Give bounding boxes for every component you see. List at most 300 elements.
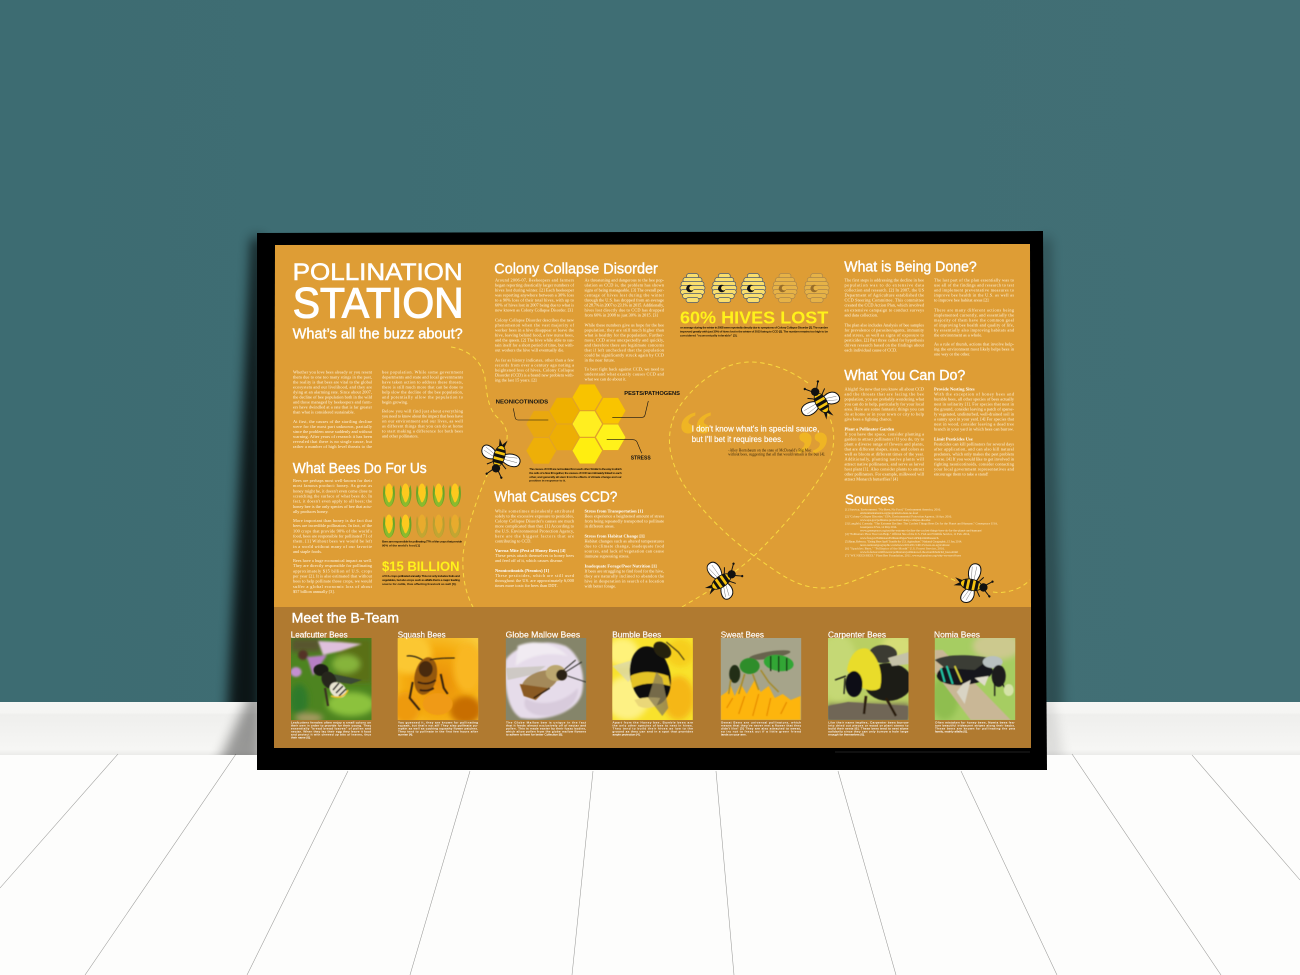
intro text: you need to know about the impact that bees have	[382, 413, 463, 418]
card: leafcutter bees: and protect it with chewed up bits of leaves, thus	[291, 732, 371, 736]
what is being done text: ing the environment most likely helps bees in	[934, 347, 1015, 352]
title: STATION	[293, 280, 464, 327]
card: carpenter bees: enough for themselves [6].	[828, 732, 865, 736]
quote: “	[678, 398, 713, 475]
intro text: than what is considered sustainable.	[293, 409, 355, 414]
colony collapse text: was reporting anywhere between a 30% loss	[495, 292, 574, 297]
colony collapse text: and the queen. [2] The hive while able to sus-	[495, 337, 575, 342]
what is being done text: The plan also includes Analysis of bee samples	[844, 322, 924, 327]
intro text: Below you will find just about everything	[382, 408, 464, 413]
what is being done text: each individual cause of CCD.	[844, 347, 897, 352]
what is being done text: by essentially also improving habitats and	[934, 327, 1015, 332]
card: globe mallow bees: which allow pollen from the globe mallow flowers	[506, 729, 586, 733]
colony collapse text: population, they are still much higher than	[584, 327, 665, 333]
panel: meet the b-team	[274, 607, 1031, 748]
colony collapse text: could be significantly struck again by CCD	[584, 352, 664, 357]
colony collapse text: To best fight back against CCD, we need to	[584, 367, 664, 373]
intro text	[293, 370, 464, 449]
what causes ccd text: times more toxic for bees than DDT.	[495, 583, 558, 588]
card: carpenter bees: solidarily since they can only burrow a hole large	[828, 729, 909, 733]
sources list: [5] Ryan, Rebecca. "Dying Bees Spell Trouble for U.S. Agriculture." National Geographic, 15 Jan. 2014.	[845, 539, 962, 544]
card: bumble bees: Apart from the Honey bee, Bumble bees are	[612, 720, 693, 724]
heading: meet the b-team: Meet the B-Team	[292, 609, 399, 625]
quote: but I'll bet it requires bees.	[692, 434, 783, 444]
colony collapse text: As threatening and dangerous to the bee pop-	[584, 277, 665, 282]
what bees do text: 100 crops that provide 90% of the world's	[293, 528, 372, 533]
what causes ccd text: immune supressing stress.	[584, 553, 630, 558]
what you can do text: predators, which only makes the pest problem	[934, 451, 1015, 457]
colony collapse text	[495, 277, 665, 382]
colony collapse text: centage of hives lost during the winter	[584, 292, 665, 297]
what you can do text: Plant a Pollinator Garden	[844, 426, 895, 431]
icon: corn pictogram	[383, 484, 461, 538]
colony collapse text: hives lost directly due to CCD has dropped	[584, 307, 665, 312]
sources list	[845, 507, 998, 559]
intro text: ers have dwindled at a rate that is far greater	[293, 404, 373, 409]
card: squash bees: mpkin as well as cooking squashy flower patches.	[398, 726, 478, 730]
what you can do text: nest in wood, consider leaving a dead tree	[934, 422, 1014, 428]
colony collapse text: worker bees in a hive disappear or leave the	[495, 327, 574, 332]
what you can do text: give bees a fighting chance.	[844, 417, 892, 422]
what you can do text: after application, and can also kill natural	[934, 446, 1015, 452]
what causes ccd text: These pesticides, which are still used	[495, 573, 575, 579]
colony collapse text: of 28.7% in 2007 to 23.1% in 2015. Additionally,	[584, 302, 664, 308]
icon: bee lower right	[951, 560, 997, 607]
colony collapse text: in the near future.	[584, 357, 615, 362]
what causes ccd text: due to climate change, inadequate food	[584, 543, 665, 549]
stat: $15 billion: $15 BILLION	[382, 558, 460, 574]
intro text: since the problem arose suddenly and without	[293, 429, 373, 434]
what bees do text: $57 billion annually [3].	[293, 589, 335, 594]
sources list: [6] "Sparkles: Bees." "Pollinator of the Month" U.S. Forest Service, 2016.	[845, 546, 945, 552]
what is being done text: an extensive campaign to conduct surveys	[844, 307, 924, 312]
what causes ccd text: and feed off of it, which causes disease.	[495, 558, 563, 564]
what causes ccd text: Colony Collapse Disorder's causes are much	[495, 518, 575, 523]
honeycomb caption: The causes of CCD are not isolated from each other. Similar to the way in which	[529, 467, 622, 471]
what causes ccd text: If bees are struggling to find food for the hive,	[584, 569, 664, 575]
honeycomb caption: the cells of a hive fit together, the causes of CCD are intimately linked to each	[529, 471, 622, 475]
what is being done text: CCD Steering Committee. This committee	[844, 297, 924, 302]
what bees do text: bees to help pollinate those crops, we would	[293, 579, 373, 585]
what causes ccd text: Stress from Transportation [1]	[584, 508, 644, 513]
card: squash bees: You guessed it, they are known for pollinating	[398, 720, 478, 724]
intro text: to start making a difference for both bees	[382, 428, 463, 433]
card: globe mallow bees: The Globe Mallow bee is unique in the fact	[506, 720, 586, 724]
card: squash bees	[398, 631, 478, 736]
what you can do text: With the exception of honey bees and	[934, 392, 1015, 397]
quote: I don't know what's in special sauce,	[692, 424, 819, 434]
heading: colony collapse disorder: Colony Collapse Disorder	[494, 260, 658, 277]
what bees do text: honey bee is the only species of bee that actu-	[293, 504, 373, 509]
what causes ccd text: solely to the excessive exposure to pesticides,	[495, 513, 574, 519]
honeycomb caption: other, and generally all stem from the effects of climate change and our	[529, 475, 623, 479]
what causes ccd text: contributing to CCD.	[495, 538, 531, 543]
intro text: Whether you love bees already or you resent	[293, 370, 373, 375]
card: globe mallow bees	[505, 629, 587, 736]
what you can do text: fighting neonicotinoids, consider contacting	[934, 461, 1015, 467]
colony collapse text: Disorder (CCD) is a brand new problem with-	[495, 372, 575, 377]
card: nomia bees	[934, 631, 1016, 733]
what you can do text: Limit Pesticides Use	[934, 436, 973, 441]
floor with planks	[0, 754, 1300, 975]
$15 billion caption: of U.S. crops pollinated annually. This not only includes fruits and	[382, 574, 460, 578]
what you can do text: Alright! So now that you know all about CCD	[844, 387, 924, 392]
card: sweat bees: Sweat Bees are universal pollinators, which	[721, 720, 801, 724]
what is being done text: The last part of the plan essentially was to	[934, 277, 1014, 282]
what you can do text: host plant [1]. Also consider plants to attract	[844, 466, 925, 471]
$15 billion caption: source for cattle, thus affecting livestock as well [3].	[382, 582, 457, 586]
intro text: and those managed by beekeepers and farm-	[293, 399, 373, 404]
what is being done text: the environment as a whole.	[934, 332, 982, 337]
baseboard	[0, 702, 1300, 755]
what you can do text: plant a diverse range of flowers and plants,	[844, 441, 924, 447]
card: sweat bees	[721, 629, 802, 736]
corn caption: 90% of the world's food [1]	[382, 544, 420, 548]
what is being done text: As a rule of thumb, actions that involve help-	[934, 342, 1015, 348]
card: nomia bees: family, mainly alfalfa [6].	[935, 729, 968, 733]
card: globe mallow bees: pollen. This is made easier by their fuzzy bodies,	[506, 726, 586, 730]
title: POLLINATION	[293, 259, 463, 286]
what is being done text: pesticides. [2] Part three called for hypothesis	[844, 337, 924, 342]
intro text: and other pollinators.	[382, 433, 419, 438]
intro text: begin growing.	[382, 399, 408, 404]
title: What’s all the buzz about?	[293, 326, 463, 342]
card: carpenter bees: Like their name implies, Carpenter bees burrow	[828, 720, 909, 724]
stat: 60% hives lost: 60% HIVES LOST	[680, 307, 829, 327]
what you can do text: branch in your yard in which bees can burrow.	[934, 427, 1014, 432]
heading: what you can do: What You Can Do?	[844, 367, 965, 384]
sources list: environmentamerica.org/programs/no-bees-no-food	[860, 511, 918, 515]
what you can do text: the ground, consider leaving a patch of sparse-	[934, 407, 1015, 413]
what causes ccd text: sources, and lack of vegetation can cause	[584, 548, 664, 554]
colony collapse text: tain itself for a short period of time, but with-	[495, 342, 575, 348]
card: sweat bees: lands on your arm.	[721, 732, 747, 736]
what bees do text: most famous product: honey. As great as	[293, 483, 372, 488]
what you can do text: attract Monarch butterflies! [4]	[844, 476, 898, 481]
poster	[274, 244, 1031, 748]
icon: bee lower loop	[695, 552, 749, 606]
icon: beehives pictogram	[680, 274, 829, 302]
card: leafcutter bees: Leafcutter Bees	[291, 629, 348, 639]
heading: what is being done: What is Being Done?	[844, 259, 977, 276]
card: globe mallow bees: to adhere to them for better Collection [6].	[506, 732, 563, 736]
what causes ccd text: in different areas.	[584, 523, 615, 528]
colony collapse text: hive, leaving behind food, a few nurse bees,	[495, 332, 574, 338]
colony collapse text: hives lost during winter. [2] Each beekeeper	[495, 287, 575, 292]
sources list: Greenpeace USA, 14 May 2014.	[860, 525, 897, 530]
sources list: [3] Langfeld, Cassady. "The Extreme Decline: The Coolest Things Bees Do for the Planet and Humans." Greenpeace USA.	[845, 522, 998, 526]
what causes ccd text: Inadequate Forage/Poor Nutrition [1]	[584, 564, 657, 569]
colony collapse text: what is healthy for the population. Further-	[584, 332, 665, 337]
card: bumble bees: ground as they can and in a spot that provides	[612, 729, 693, 733]
intro text: At first, the causes of the startling decline	[293, 419, 372, 425]
what you can do text: well as bloom at different times of the year.	[844, 451, 924, 456]
what you can do text: Additionally, planting native plants will	[844, 456, 925, 462]
what is being done text: improve bee health in the U.S. as well as	[934, 292, 1014, 297]
intro text: on our environment and our lives, as well	[382, 418, 464, 424]
card: leafcutter bees: their own in order to provide for their young. They	[291, 723, 371, 727]
what causes ccd text: the U.S. Environmental Protection Agency,	[495, 528, 574, 534]
card: leafcutter bees: their name [6].	[291, 735, 311, 739]
what you can do text: your local government representatives and	[934, 466, 1015, 471]
what bees do text: bees are incredible pollinators. In fact, of the	[293, 523, 372, 529]
what is being done text: and stress, as well as signs of exposure to	[844, 332, 924, 338]
what bees do text: ally produces honey.	[293, 509, 328, 514]
colony collapse text: ing the last 15 years. [2]	[495, 377, 537, 382]
what you can do text: nest in solitarity [1]. For species that nest in	[934, 402, 1015, 407]
what is being done text: created the CCD Action Plan, which involved	[844, 302, 925, 308]
colony collapse text: to a 90% loss of their total hives, with up to	[495, 297, 574, 303]
colony collapse text: from 60% in 2008 to just 30% in 2015. [3]	[584, 312, 658, 317]
what you can do text: Provide Nesting Sites	[934, 387, 975, 392]
heading: what causes ccd: What Causes CCD?	[494, 489, 617, 506]
card: carpenter bees: build their nests [6]. These bees tend to nest alone	[828, 726, 909, 730]
what you can do text: area. Here are some fantastic things you can	[844, 407, 925, 412]
what is being done text: collection and research. [2] In 2007, the US	[844, 287, 925, 293]
quote: without bees, suggesting that all that would remain is the bun [4].	[728, 452, 825, 458]
corn caption	[382, 540, 462, 548]
colony collapse text: that if left unchecked that the population	[584, 347, 665, 352]
what bees do text: in a world without many of our favorite	[293, 544, 372, 549]
hives caption: considered "economically tolerable" [3].	[680, 334, 738, 338]
card: sweat bees: means that they've never met a flower that they	[721, 723, 801, 727]
icon: bee upper right of loop	[792, 375, 846, 428]
colony collapse text: As far as history indicates, other than a few	[495, 357, 575, 363]
intro text: help slow the decline of the bee population,	[382, 389, 463, 395]
what causes ccd text: Stress from Habitat Change [1]	[584, 533, 645, 538]
title	[293, 259, 464, 342]
honeycomb diagram: NEONICOTINOIDS	[496, 400, 549, 406]
quote: -Alley Bornsbaum on the state of McDonald's Big Mac	[728, 448, 812, 452]
what you can do text	[844, 387, 1015, 481]
colony collapse text: 60% of hives lost in 2007 being due to what is	[495, 302, 574, 307]
colony collapse text: Around 2006-07, Beekeepers and farmers	[495, 277, 574, 283]
card: squash bees: sunrise [4].	[398, 732, 413, 736]
quote	[678, 398, 830, 495]
card: bumble bees: Bumble Bees	[612, 629, 661, 639]
corn caption: Bees are responsible for pollinating 77% of the crops that provide	[382, 540, 462, 544]
what causes ccd text	[495, 508, 665, 589]
colony collapse text: signs of being manageable. [3] The overall per-	[584, 287, 665, 292]
poster gold background	[274, 244, 1031, 608]
what bees do text: and staple foods.	[293, 549, 322, 554]
colony collapse text: what we can do about it.	[584, 377, 627, 382]
card: carpenter bees: into dried out pieces or wood or plant stems to	[828, 723, 909, 727]
hives caption: on average during the winter in 2008 were reportedly directly due to symptoms of Colony Collapse Disorder [2]. The number	[680, 326, 829, 330]
intro text: rather a number of high level threats to the	[293, 444, 372, 449]
what is being done text: and implement preventative measures to	[934, 287, 1014, 292]
sources list: news.nationalgeographic.com/news/2014/01/140115-bees-us-agriculture/	[860, 543, 950, 547]
intro text: ecosystem and our livelihood, and they are	[293, 384, 372, 390]
what you can do text: Pesticides can kill pollinators for several days	[934, 441, 1014, 446]
colony collapse text: ulation as CCD is, the problem has shown	[584, 282, 665, 288]
card: nomia bees: Often mistaken for honey bees, Nomia bees fea-	[935, 720, 1015, 724]
what is being done text: for prevalence of parasites/agents, immunity	[844, 327, 925, 333]
intro text: have taken action to address these threats,	[382, 380, 463, 386]
intro text: there is still much more that can be done to	[382, 384, 463, 390]
what is being done text: one way or the other.	[934, 352, 970, 357]
black poster frame	[257, 231, 1047, 770]
colony collapse text: through the U.S. has dropped from an average	[584, 297, 664, 302]
what you can do text: worse. [4] If you would like to get involved in	[934, 456, 1015, 461]
intro text: were for the most part unknown, partially	[293, 424, 373, 430]
intro text: departments and state and local governments	[382, 375, 463, 380]
what is being done text: population was to do extensive data	[844, 282, 924, 287]
what you can do text: you can do to help, particularly for your local	[844, 402, 925, 408]
what is being done text: use all of the findings and research to test	[934, 282, 1015, 287]
what is being done text: driven research based on the findings about	[844, 342, 925, 347]
what is being done text: majority of them have the common goal	[934, 317, 1015, 322]
card: leafcutter bees: essentially "bread bread loaves" of pollen and	[291, 726, 371, 730]
quote: ”	[795, 418, 830, 495]
honeycomb caption	[529, 467, 623, 483]
hives caption: improved greatly with just 30% of hives lost in the winter of 2015 being to CCD [3]. The number remains too high to be	[680, 330, 828, 334]
intro text: as different things that you can do at home	[382, 423, 463, 428]
what you can do text: other pollinators. For example, milkweed will	[844, 471, 925, 477]
colony collapse text: now known as Colony Collapse Disorder. [3]	[495, 307, 573, 312]
what you can do text: a sunny spot in your yard. [4] For species that	[934, 417, 1015, 422]
what causes ccd text: While sometimes mistakenly attributed	[495, 508, 575, 513]
what you can do text: ly vegetated, undisturbed, well-drained soil in	[934, 412, 1015, 418]
intro text: and potentially allow the population to	[382, 394, 463, 399]
what you can do text: population, you are probably wondering what	[844, 397, 925, 403]
what you can do text: attract native pollinators, and serve as larval	[844, 461, 925, 467]
what causes ccd text: they are naturally inclined to abandon the	[584, 574, 664, 579]
what bees do text: honey might be, it doesn't even come close to	[293, 488, 372, 494]
intro text: dying at an alarming rate. Since about 2007,	[293, 389, 372, 395]
card: bumble bees: They tend to build their hives as low to the	[612, 726, 693, 730]
card: sweat bees: didn't like! [5] They are also attracted to sweat,	[721, 726, 801, 730]
sources list: [4] "Pollinators: How You Can Help." Official Site of the U.S. Fish and Wildlife Service, 11 Feb. 2014,	[845, 532, 970, 537]
card: carpenter bees	[828, 631, 908, 736]
what is being done text: and data collection.	[844, 312, 878, 317]
what bees do text: Bees are perhaps most well-known for their	[293, 478, 373, 483]
colony collapse text: out workers the hive will eventually die.	[495, 347, 564, 352]
card: carpenter bees: Carpenter Bees	[828, 629, 886, 639]
what bees do text: approximately $15 billion of U.S. crops	[293, 568, 372, 573]
what bees do text: Bees have a huge economical impact as well.	[293, 558, 372, 563]
colony collapse text: and therefore there are legitimate concerns	[584, 342, 664, 347]
honeycomb diagram	[496, 384, 681, 464]
colony collapse text: records from over a century ago noting a	[495, 362, 574, 367]
what bees do text: More important than honey is the fact that	[293, 518, 373, 523]
colony collapse text: phenomenon when the vast majority of	[495, 322, 575, 327]
colony collapse text: While these numbers give us hope for the bee	[584, 322, 664, 327]
what causes ccd text: with better forage.	[584, 584, 616, 589]
what causes ccd text: throughout the US. are approximately 6,000	[495, 578, 574, 584]
intro text: the decline of bee population both in the wild	[293, 394, 373, 399]
what bees do text: food, bees are responsible for pollinated 71 of	[293, 534, 373, 540]
intro text: them due to one too many stings in the past,	[293, 375, 372, 381]
what bees do text: suffer a global economic loss of about	[293, 584, 373, 589]
what causes ccd text: Habitat changes such as altered temperatures	[584, 538, 664, 543]
what causes ccd text: Neonicotinoids (Neonics) [1]	[495, 568, 549, 573]
what bees do text: fact, it doesn't even apply to all bees; the	[293, 499, 372, 505]
what causes ccd text: here are the biggest factors that are	[495, 533, 574, 538]
icon: bee left of honeycomb	[476, 435, 525, 482]
intro text: bee population. While some government	[382, 370, 464, 375]
what bees do text: per year [2]. It is also estimated that without	[293, 574, 373, 578]
what you can do text: bumble bees, all other species of bees actually	[934, 397, 1015, 403]
what you can do text: encourage them to take a stand!	[934, 471, 989, 476]
what you can do text: If you have the space, consider planting a	[844, 431, 924, 437]
card: leafcutter bees	[290, 629, 375, 739]
card: leafcutter bees: nectar. When they lay their egg they leave it food	[291, 729, 371, 733]
sources list: [7] "WE NEED BEES." Plant Bee Foundation, 2011. www.plantabee.org/why-we-need-bees	[845, 554, 962, 559]
card: squash bees: Squash Bees	[398, 629, 446, 639]
intro text: the reality is that bees are vital to the global	[293, 380, 373, 384]
card: squash bees: They tend to pollinate in the first few hours after	[398, 729, 478, 733]
what is being done text: of improving bee health and quality of life,	[934, 322, 1014, 328]
card: squash bees: squash, but that's not all! They also pollinate pu-	[398, 723, 478, 727]
what is being done text: Department of Agriculture established the	[844, 292, 924, 297]
colony collapse text: more, CCD arose unexpectedly and quickly,	[584, 337, 664, 343]
what bees do text: They are directly responsible for pollinating	[293, 563, 373, 568]
card: nomia bees: These bees are known for pollinating the pea	[935, 726, 1015, 730]
colony collapse text: understand what exactly causes CCD and	[584, 372, 665, 377]
what causes ccd text: Bees experience a heightened amount of stress	[584, 513, 664, 518]
sources list: www.fws.gov/Pollinators/PollinatorPages/YouCanHelp.html#research.	[860, 536, 939, 540]
what bees do text	[293, 478, 373, 594]
what bees do text: scratching the surface of what bees do. In	[293, 494, 373, 498]
card: globe mallow bees: that it feeds almost exclusively off of nectar and	[506, 723, 586, 727]
card: sweat bees: Sweat Bees	[721, 629, 764, 639]
sources list: www.epa.gov/pollinator-protection/colony-collapse-disorder.	[860, 518, 931, 522]
what you can do text: and the threats that are facing the bee	[844, 392, 924, 397]
what you can do text: garden to attract pollinators! If you do, try to	[844, 436, 924, 442]
what bees do text: them. [1] Without bees we would be left	[293, 539, 373, 544]
what causes ccd text: Varroa Mite (Pest of Honey Bees) [4]	[495, 548, 566, 553]
sources list: www.greenpeace.org/usa/the-extreme-decline-the-coolest-things-bees-do-for-the-planet-and-humans/	[860, 529, 982, 533]
colony collapse text: began reporting drastically larger numbers of	[495, 282, 575, 287]
honeycomb diagram: STRESS	[631, 455, 651, 461]
what is being done text: to improve bee habitat areas [2]	[934, 297, 989, 302]
intro text: warning. After years of research it has been	[293, 434, 373, 439]
what is being done text: There are many different actions being	[934, 307, 1015, 312]
sources list: [2] "Colony Collapse Disorder." EPA. Environmental Protection Agency, 16 Apr. 2016.	[845, 514, 952, 519]
heading: what bees do for us: What Bees Do For Us	[293, 461, 427, 477]
card: sweat bees: so try not to freak out if a little green friend	[721, 729, 801, 733]
what is being done text: implemented currently, and essentially the	[934, 312, 1014, 318]
card: globe mallow bees: Globe Mallow Bees	[506, 629, 580, 639]
card: nomia bees: Nomia Bees	[934, 629, 980, 639]
honeycomb diagram: PESTS/PATHOGENS	[624, 391, 681, 397]
what is being done text: The first steps is addressing the decline in bee	[844, 277, 924, 282]
band background	[274, 607, 1031, 748]
card: bumble bees: ample protection [4].	[612, 732, 641, 736]
card: bumble bees: the only other species of bee to nest in hives.	[612, 723, 693, 727]
intro text: revealed that there is no single cause, but	[293, 439, 373, 445]
what causes ccd text: hive in desperation in search of a location	[584, 579, 665, 584]
wall background	[0, 0, 1300, 702]
colony collapse text: heightened loss of hives, Colony Collapse	[495, 367, 574, 373]
card: bumble bees	[612, 631, 693, 736]
hives caption	[680, 326, 829, 338]
$15 billion caption	[382, 574, 460, 586]
what you can do text: do at home or in your town or city to help	[844, 412, 924, 417]
sources list: [1] Stawicy, Environment. "No Bees, No Food." Environment America, 2016.	[845, 507, 941, 512]
card: nomia bees: ture beautiful iridescent stripes along their backs.	[935, 723, 1015, 727]
what causes ccd text: from being repeatedly transported to pollinate	[584, 518, 664, 523]
honeycomb caption: position in response to it.	[529, 479, 566, 483]
dashed flight path	[451, 347, 1030, 607]
sources list: www.fs.fed.us/wildflowers/pollinators/pollinator-of-the-month/halictid_bees.shtml	[860, 550, 958, 554]
card: leafcutter bees: Leafcutters females often enjoy a small colony on	[291, 720, 371, 724]
colony collapse text: Colony Collapse Disorder describes the new	[495, 317, 575, 322]
frame shadow	[215, 238, 1066, 770]
what is being done text	[844, 277, 1015, 357]
what causes ccd text: more complicated than that. [1] According to	[495, 523, 574, 528]
